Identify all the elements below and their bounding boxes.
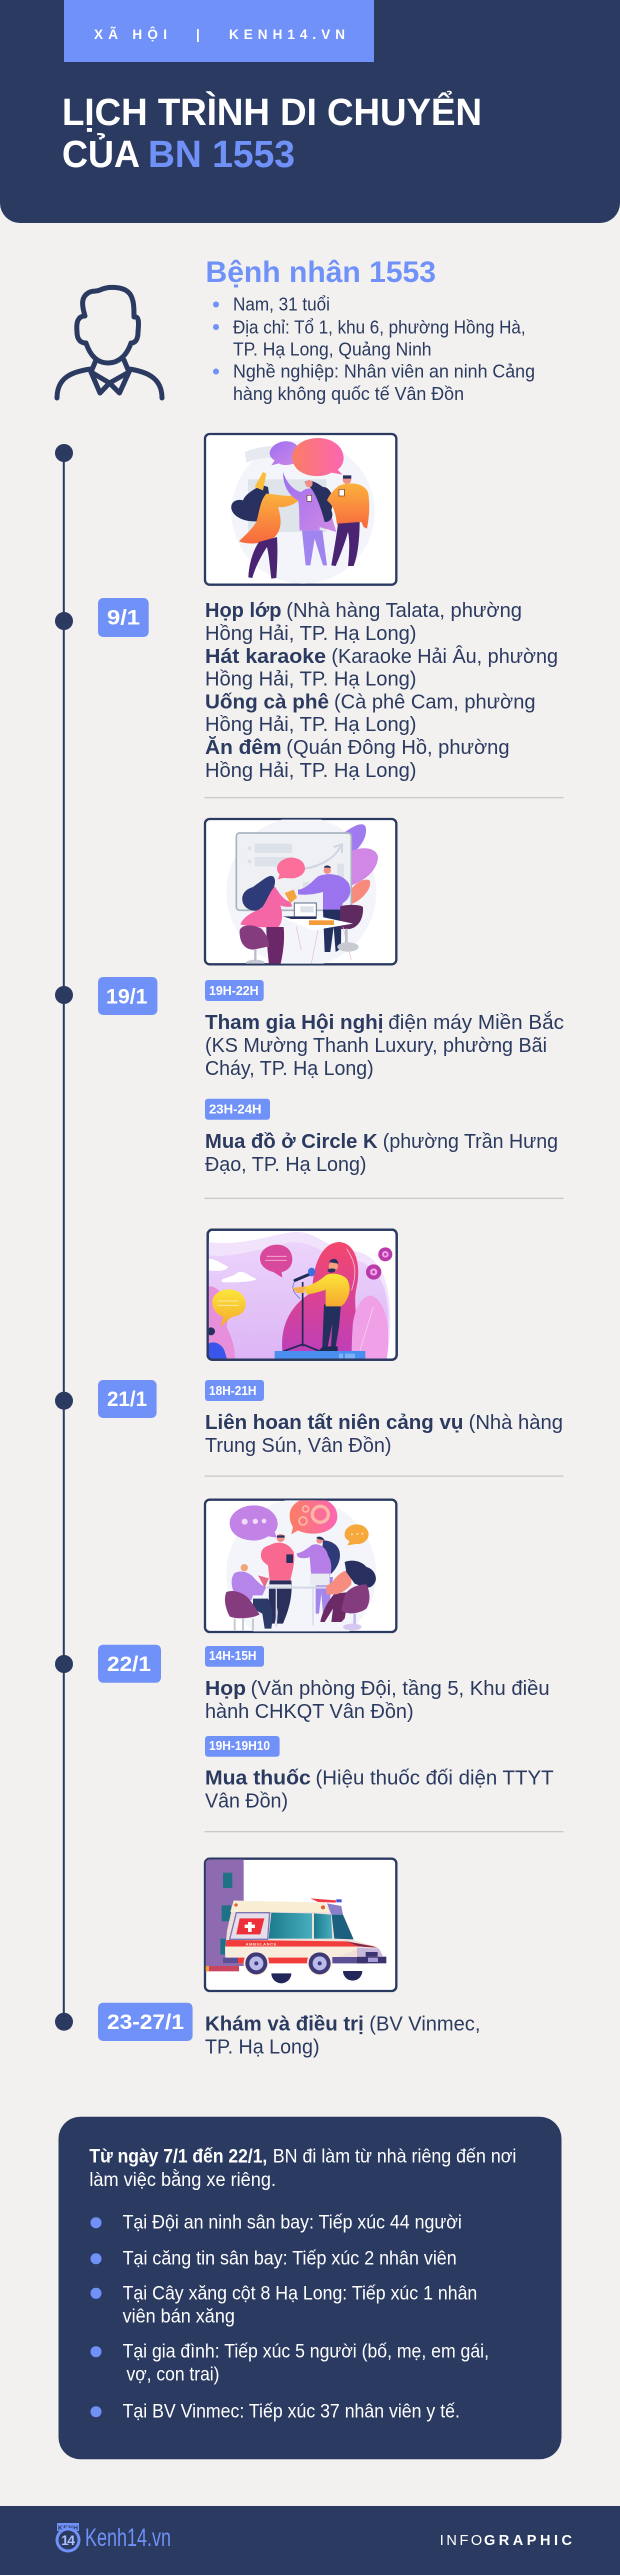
events on 22/1: Mua thuốc	[205, 1768, 311, 1790]
illustration: singer on stage	[207, 1230, 397, 1360]
date badge: 23-27/1: 23-27/1	[107, 2011, 184, 2034]
events on 19/1: (KS Mường Thanh Luxury, phường Bãi	[205, 1035, 547, 1057]
time tag: 19H-19H10	[205, 1736, 280, 1757]
events on 9/1: Hát karaoke	[205, 646, 326, 668]
summary intro: làm việc bằng xe riêng.	[89, 2168, 276, 2191]
events on 19/1	[205, 980, 564, 1176]
contact list: Tại gia đình: Tiếp xúc 5 người (bố, mẹ, em gái,	[123, 2341, 489, 2363]
time tag: 14H-15H: 14H-15H	[209, 1648, 256, 1663]
events on 9/1: Hồng Hải, TP. Hạ Long)	[205, 714, 416, 736]
time tag: 19H-19H10: 19H-19H10	[209, 1738, 270, 1753]
events on 23-27/1: (BV Vinmec,	[369, 2014, 480, 2036]
timeline axis	[55, 444, 73, 2031]
contact list	[90, 2212, 489, 2423]
contact list: vợ, con trai)	[126, 2364, 220, 2386]
events on 22/1: Vân Đồn)	[205, 1791, 288, 1813]
summary intro: BN đi làm từ nhà riêng đến nơi	[273, 2146, 516, 2168]
patient information: Bệnh nhân 1553	[206, 256, 436, 289]
summary intro: Từ ngày 7/1 đến 22/1,	[89, 2146, 267, 2168]
contact list: Tại BV Vinmec: Tiếp xúc 37 nhân viên y tế.	[123, 2401, 460, 2423]
events on 9/1: Ăn đêm	[205, 736, 282, 759]
logo: Kenh14.vn: 14	[61, 2532, 75, 2548]
infographic label: INFO	[440, 2533, 482, 2549]
category tag: KENH14.VN	[229, 27, 345, 42]
illustration: conference	[205, 817, 396, 967]
title	[62, 89, 482, 176]
panel: contact summary	[58, 2117, 562, 2459]
contact list: Tại Đội an ninh sân bay: Tiếp xúc 44 người	[123, 2212, 462, 2234]
date badge: 23-27/1	[98, 2003, 193, 2041]
events on 9/1: (Quán Đông Hồ, phường	[286, 737, 509, 759]
events on 19/1: Mua đồ ở Circle K	[205, 1131, 378, 1153]
date badge: 9/1: 9/1	[107, 606, 140, 629]
logo: Kenh14.vn: Kenh14.vn	[85, 2524, 171, 2552]
patient information: Nghề nghiệp: Nhân viên an ninh Cảng	[233, 362, 535, 382]
logo: Kenh14.vn	[56, 2523, 171, 2552]
category tag: |	[196, 27, 200, 42]
summary intro	[89, 2146, 516, 2191]
date badge: 19/1	[98, 977, 157, 1015]
title: LỊCH TRÌNH DI CHUYỂN	[62, 89, 482, 134]
events on 23-27/1: Khám và điều trị	[205, 2014, 364, 2036]
events on 22/1: (Hiệu thuốc đối diện TTYT	[316, 1768, 554, 1790]
date badge: 19/1: 19/1	[106, 986, 148, 1009]
events on 19/1: Cháy, TP. Hạ Long)	[205, 1058, 374, 1080]
date badge: 22/1: 22/1	[107, 1653, 151, 1676]
illustration: ambulance	[205, 1859, 396, 1991]
time tag: 19H-22H: 19H-22H	[209, 983, 259, 998]
time tag: 19H-22H	[205, 980, 264, 1001]
illustration: ambulance: AMBULANCE	[246, 1941, 277, 1946]
date badge: 22/1	[98, 1645, 161, 1683]
events on 19/1: (phường Trần Hưng	[383, 1131, 558, 1153]
illustration: class reunion	[205, 434, 396, 585]
header panel	[0, 0, 620, 223]
illustration: meeting	[205, 1498, 396, 1649]
contact list: Tại Cây xăng cột 8 Hạ Long: Tiếp xúc 1 nhân	[123, 2282, 477, 2304]
contact list: viên bán xăng	[123, 2305, 235, 2327]
events on 21/1: Trung Sún, Vân Đồn)	[205, 1435, 392, 1457]
date badge: 21/1	[98, 1380, 157, 1418]
events on 9/1: Hồng Hải, TP. Hạ Long)	[205, 623, 416, 645]
events on 9/1: Hồng Hải, TP. Hạ Long)	[205, 760, 416, 782]
events on 9/1: Họp lớp	[205, 600, 282, 622]
contact list: Tại căng tin sân bay: Tiếp xúc 2 nhân viên	[123, 2248, 457, 2270]
events on 22/1	[205, 1646, 554, 1813]
time tag: 18H-21H	[205, 1380, 264, 1401]
time tag: 14H-15H	[205, 1646, 264, 1667]
events on 22/1: (Văn phòng Đội, tầng 5, Khu điều	[251, 1678, 550, 1700]
footer bar	[0, 2506, 620, 2575]
time tag: 23H-24H: 23H-24H	[209, 1102, 262, 1117]
events on 9/1: (Karaoke Hải Âu, phường	[331, 645, 558, 668]
patient information: Địa chỉ: Tổ 1, khu 6, phường Hồng Hà,	[233, 317, 526, 337]
events on 23-27/1: TP. Hạ Long)	[205, 2037, 320, 2059]
patient information: hàng không quốc tế Vân Đồn	[233, 384, 464, 404]
title: CỦA	[62, 132, 140, 176]
patient information: Nam, 31 tuổi	[233, 295, 330, 315]
events on 19/1: điện máy Miền Bắc	[388, 1011, 564, 1034]
events on 21/1: (Nhà hàng	[469, 1412, 563, 1434]
events on 9/1: (Nhà hàng Talata, phường	[286, 600, 522, 622]
date badge: 9/1	[98, 598, 149, 637]
events on 22/1: hành CHKQT Vân Đồn)	[205, 1701, 414, 1723]
time tag: 23H-24H	[205, 1099, 270, 1120]
patient information	[206, 256, 535, 404]
infographic label	[440, 2533, 573, 2549]
events on 9/1: Uống cà phê	[205, 692, 329, 714]
events on 21/1: Liên hoan tất niên cảng vụ	[205, 1412, 463, 1434]
title: BN 1553	[148, 134, 295, 176]
events on 9/1: (Cà phê Cam, phường	[334, 692, 536, 714]
events on 19/1: Đạo, TP. Hạ Long)	[205, 1154, 366, 1176]
time tag: 18H-21H: 18H-21H	[209, 1383, 256, 1398]
icon: patient avatar	[57, 287, 162, 398]
date badge: 21/1: 21/1	[107, 1388, 147, 1411]
events on 21/1	[205, 1380, 563, 1457]
events on 9/1	[205, 600, 558, 782]
events on 9/1: Hồng Hải, TP. Hạ Long)	[205, 669, 416, 691]
events on 23-27/1	[205, 2014, 480, 2059]
patient information: TP. Hạ Long, Quảng Ninh	[233, 339, 432, 359]
logo: Kenh14.vn: KENH	[58, 2525, 78, 2532]
events on 22/1: Họp	[205, 1678, 246, 1700]
events on 19/1: Tham gia Hội nghị	[205, 1012, 384, 1034]
category tag: XÃ HỘI	[94, 27, 167, 42]
category tag	[64, 0, 374, 62]
infographic label: GRAPHIC	[484, 2533, 573, 2549]
